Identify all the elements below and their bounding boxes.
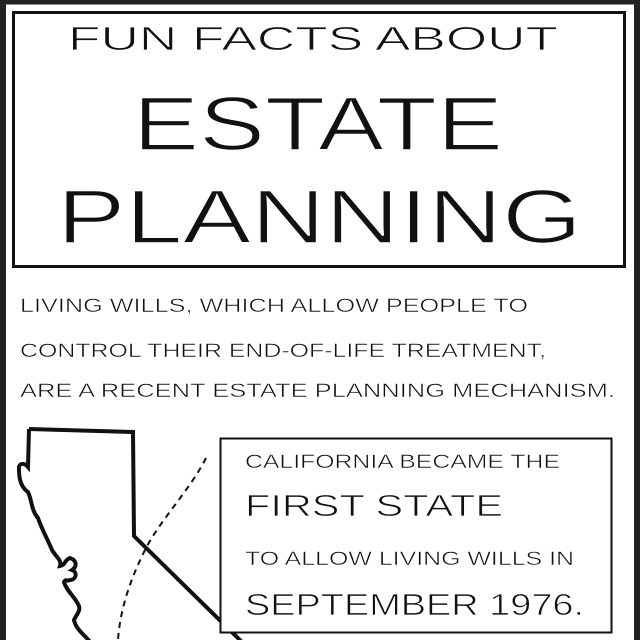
intro text: LIVING WILLS, WHICH ALLOW PEOPLE TO [20, 296, 528, 317]
callout box: TO ALLOW LIVING WILLS IN [245, 549, 574, 570]
title line 2: ESTATE [133, 82, 503, 167]
callout box: SEPTEMBER 1976. [245, 587, 584, 622]
callout box: FIRST STATE [245, 488, 503, 523]
icon: california map [19, 429, 245, 640]
title line 3: PLANNING [57, 175, 582, 260]
intro text [20, 296, 615, 402]
intro text: CONTROL THEIR END-OF-LIFE TREATMENT, [20, 341, 546, 362]
intro text: ARE A RECENT ESTATE PLANNING MECHANISM. [20, 381, 615, 402]
callout box [220, 438, 612, 632]
callout box: CALIFORNIA BECAME THE [245, 452, 560, 473]
title line 1: FUN FACTS ABOUT [68, 20, 558, 57]
title box [14, 12, 624, 266]
